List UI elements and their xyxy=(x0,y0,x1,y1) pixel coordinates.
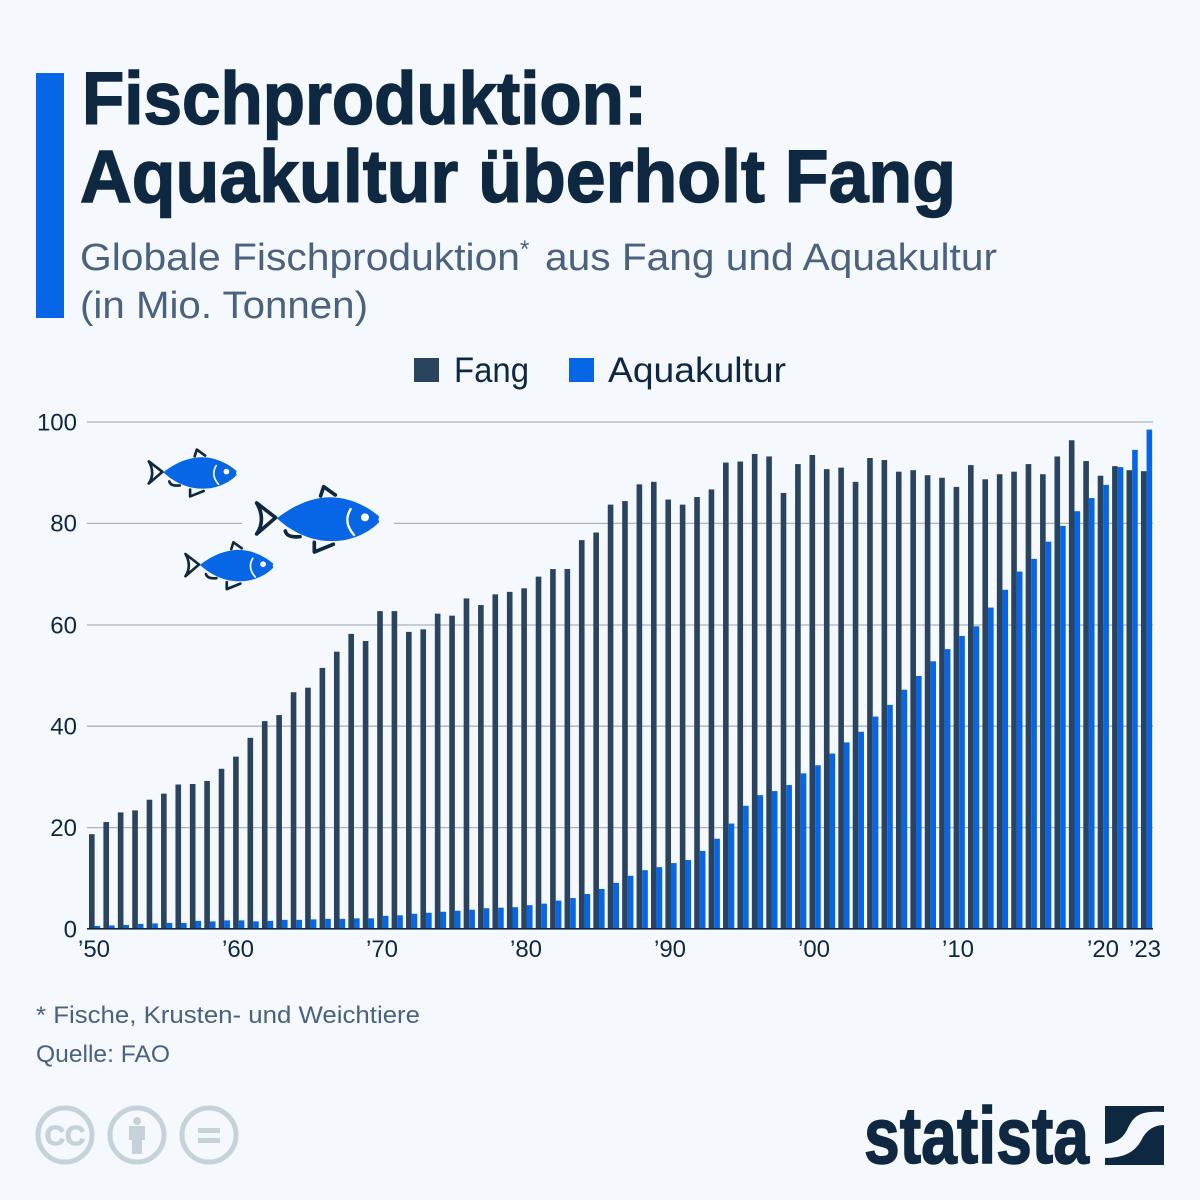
x axis labels: ’80 xyxy=(510,936,542,963)
bar chart: Aquakultur xyxy=(95,430,1152,929)
legend: Fang xyxy=(454,351,529,390)
x axis labels: ’90 xyxy=(654,936,686,963)
x axis labels: ’23 xyxy=(1129,936,1161,963)
icon: lower small fish xyxy=(185,542,273,589)
title: Aquakultur überholt Fang xyxy=(80,135,956,218)
bar chart: Fang xyxy=(89,440,1147,929)
legend xyxy=(414,351,786,390)
x axis labels: ’50 xyxy=(78,936,110,963)
x axis labels: ’20 xyxy=(1087,936,1119,963)
x axis labels: ’70 xyxy=(366,936,398,963)
legend: Aquakultur xyxy=(608,351,786,390)
title: Fischproduktion: xyxy=(82,57,647,140)
icon: creative commons licence: CC xyxy=(45,1120,85,1151)
subtitle: aus Fang und Aquakultur xyxy=(545,237,997,279)
grid lines xyxy=(87,422,1153,828)
footnote: * Fische, Krusten- und Weichtiere xyxy=(36,1002,420,1029)
subtitle: * xyxy=(520,236,529,263)
subtitle xyxy=(80,236,997,327)
y axis labels: 100 xyxy=(37,410,77,436)
x axis labels xyxy=(78,936,1161,963)
title xyxy=(80,57,956,218)
icon: creative commons licence xyxy=(38,1108,236,1162)
icon: fish group xyxy=(149,450,379,589)
x axis labels: ’10 xyxy=(942,936,974,963)
y axis labels: 80 xyxy=(50,510,77,538)
logo: statista: statista xyxy=(864,1091,1089,1180)
subtitle: (in Mio. Tonnen) xyxy=(80,285,368,327)
x axis labels: ’00 xyxy=(798,936,830,963)
y axis labels: 60 xyxy=(50,612,77,640)
subtitle: Globale Fischproduktion xyxy=(80,237,520,279)
y axis labels: 40 xyxy=(50,714,77,740)
x axis baseline xyxy=(87,928,1153,930)
x axis labels: ’60 xyxy=(222,936,254,963)
y axis labels: 0 xyxy=(64,916,77,944)
y axis labels xyxy=(37,410,77,944)
accent bar xyxy=(36,73,64,318)
source: Quelle: FAO xyxy=(36,1041,170,1068)
icon: large fish xyxy=(257,487,379,552)
icon: upper small fish xyxy=(149,450,237,496)
y axis labels: 20 xyxy=(50,815,77,842)
